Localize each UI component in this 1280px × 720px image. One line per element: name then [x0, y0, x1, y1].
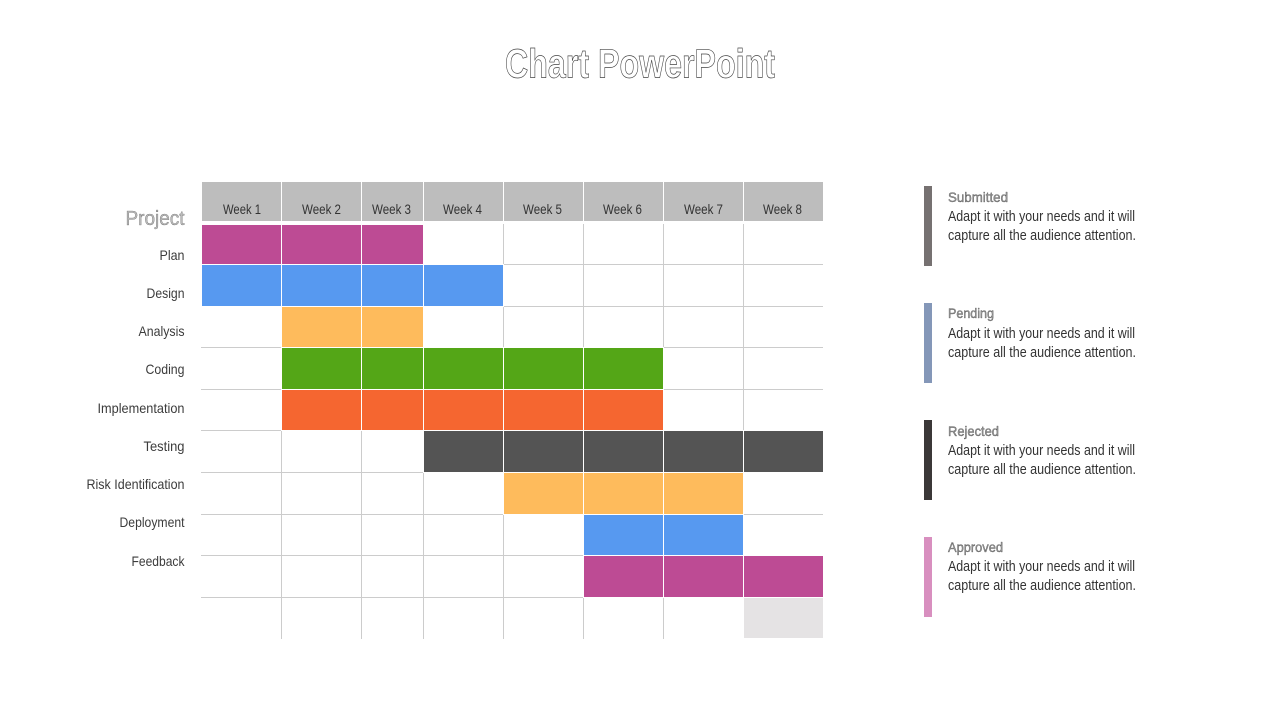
legend: Rejected: capture all the audience attention.	[948, 462, 1136, 478]
legend: Pending	[924, 303, 1136, 383]
bar: Deployment	[583, 514, 744, 556]
legend: Rejected	[924, 420, 1136, 500]
row labels: Deployment	[120, 514, 185, 530]
legend: Submitted	[924, 186, 1136, 266]
row labels: Plan	[160, 247, 184, 263]
title: Chart PowerPoint	[505, 40, 775, 86]
row labels: Risk Identification	[86, 476, 184, 492]
legend: Rejected: Rejected	[948, 423, 999, 439]
legend: Rejected: Adapt it with your needs and it will	[948, 443, 1135, 459]
header row: weeks: Week 6	[603, 201, 642, 217]
legend: Pending: Adapt it with your needs and it will	[948, 326, 1135, 342]
header row: weeks: Week 3	[372, 201, 411, 217]
header row: weeks: Week 2	[302, 201, 341, 217]
legend: Submitted: Adapt it with your needs and it will	[948, 209, 1135, 225]
row labels: Coding	[146, 361, 184, 377]
empty grey cell	[743, 597, 823, 640]
legend: Submitted: capture all the audience attention.	[948, 228, 1136, 244]
bar: Coding	[281, 347, 664, 390]
row labels: Design	[146, 285, 184, 301]
row labels	[86, 208, 185, 569]
bar: Implementation	[281, 389, 664, 431]
legend: Submitted: Submitted	[948, 189, 1008, 205]
row labels: Testing	[144, 438, 184, 454]
row labels: Analysis	[138, 323, 184, 339]
bar: Risk Identification	[503, 472, 744, 515]
legend: Pending: Pending	[948, 305, 994, 321]
chart grid	[201, 224, 823, 639]
legend: Approved: Approved	[948, 539, 1003, 555]
row labels: Implementation	[98, 400, 184, 416]
row labels: Feedback	[132, 553, 185, 569]
bar: Feedback	[583, 555, 823, 598]
header row: weeks: Week 7	[684, 201, 723, 217]
legend: Pending: capture all the audience attention.	[948, 345, 1136, 361]
header row: weeks: Week 4	[443, 201, 482, 217]
header row: weeks: Week 8	[763, 201, 802, 217]
header row: weeks: Week 1	[223, 201, 261, 217]
gantt chart	[201, 182, 823, 640]
bar: Design	[201, 264, 504, 307]
legend: Approved: capture all the audience attention.	[948, 578, 1136, 594]
bar: Plan	[201, 224, 424, 265]
header row: weeks	[202, 182, 823, 221]
legend: Approved: Adapt it with your needs and it will	[948, 559, 1135, 575]
column heading: Project: Project	[126, 208, 185, 230]
bar: Analysis	[281, 306, 424, 348]
legend: Approved	[924, 537, 1136, 617]
bar: Testing	[423, 430, 823, 473]
header row: weeks: Week 5	[523, 201, 562, 217]
